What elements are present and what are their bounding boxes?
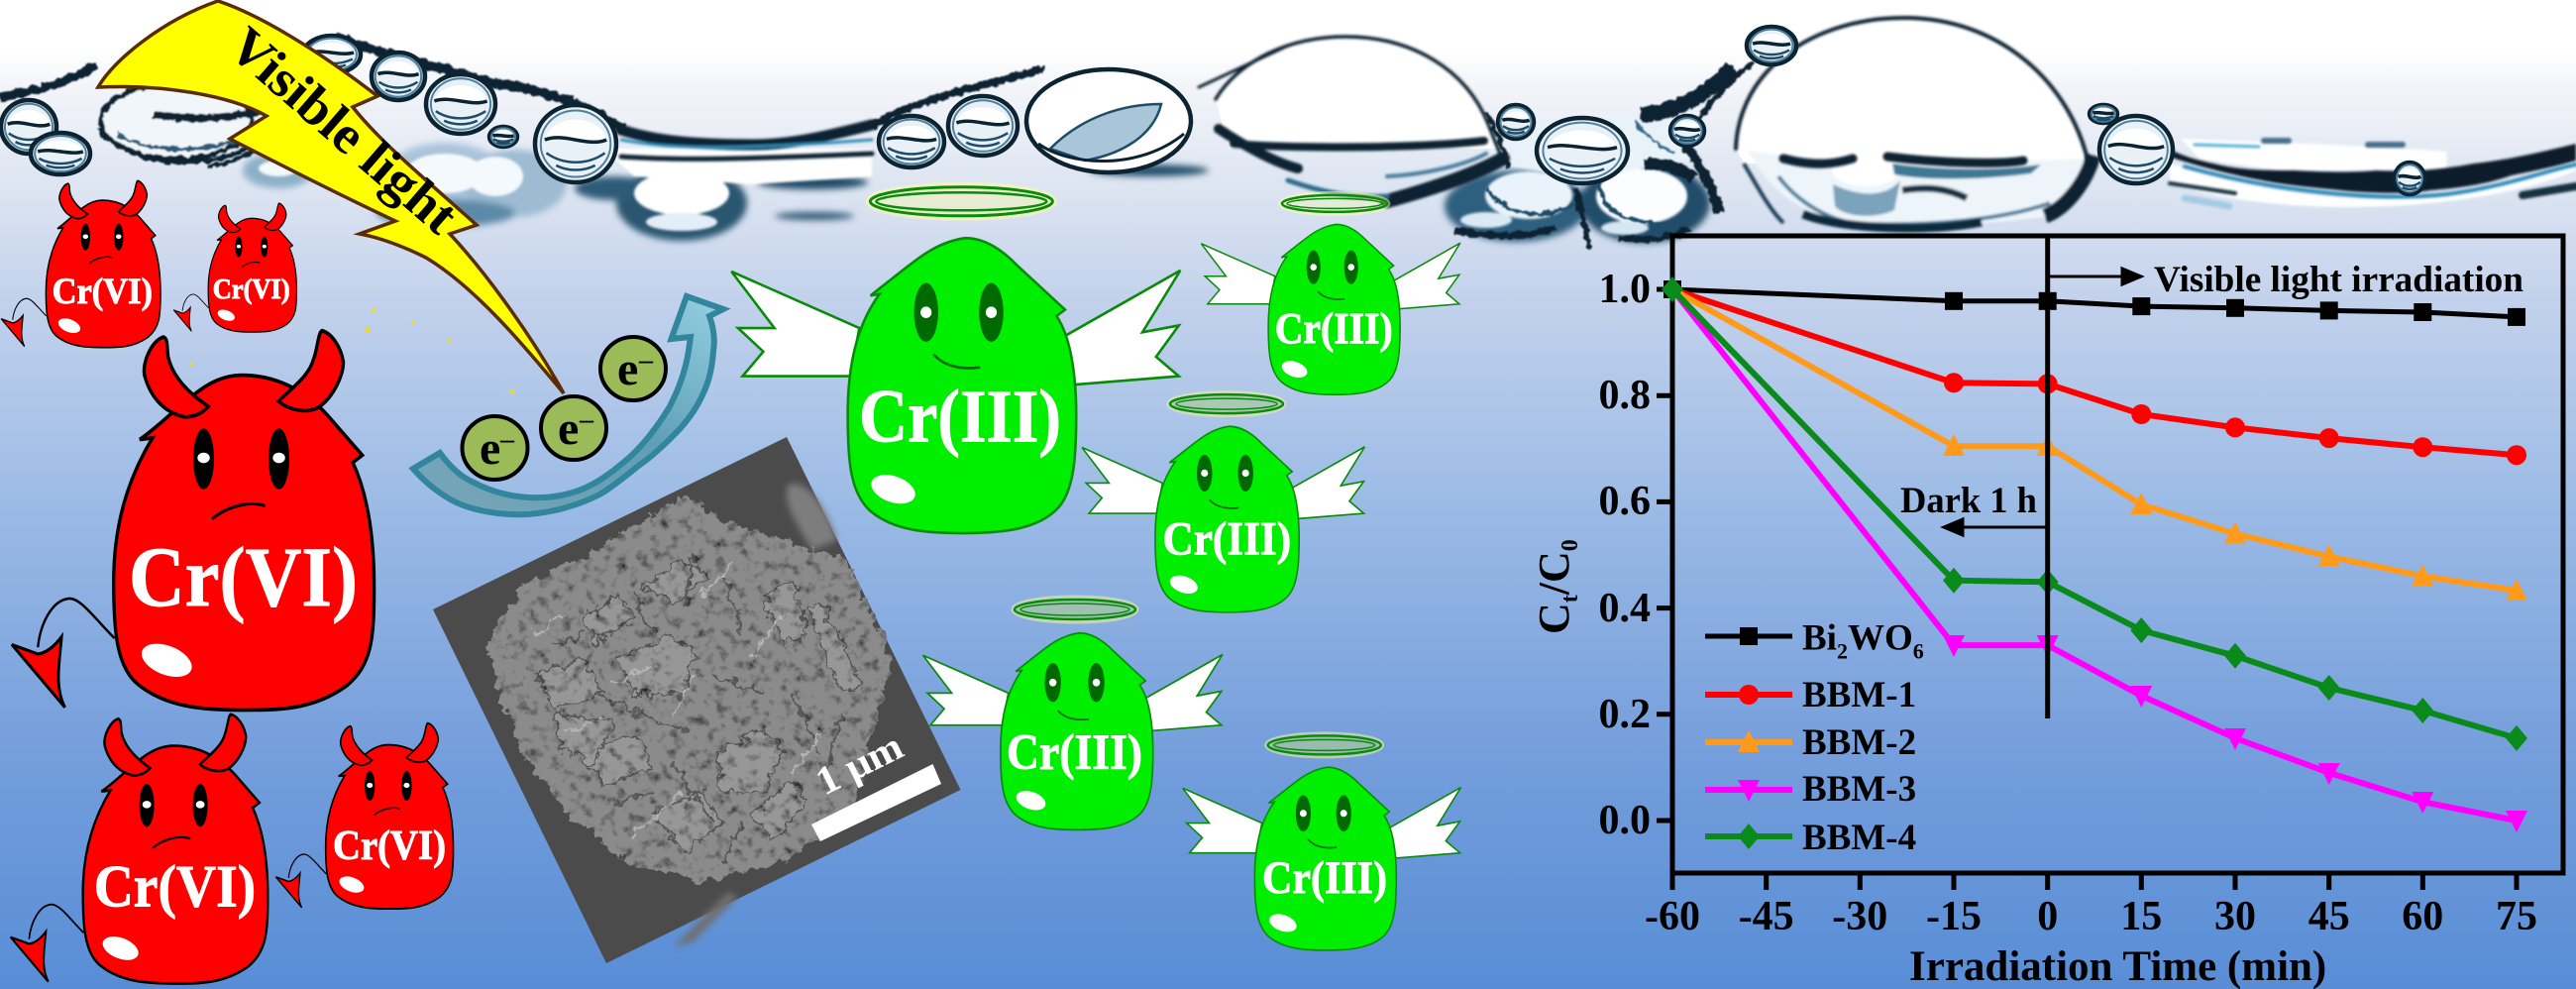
legend: BBM-1	[1705, 675, 1916, 715]
legend: Bi2WO6: 6	[1913, 639, 1924, 664]
devil: Cr(VI) bottom right	[275, 723, 454, 909]
plot frame	[1672, 236, 2563, 873]
SEM micrograph	[433, 437, 961, 963]
devil: Cr(VI) top left	[1, 180, 161, 348]
halo	[1014, 598, 1136, 621]
series: Bi2WO6	[1664, 280, 2525, 326]
line chart: Ct/C0 vs irradiation time	[1530, 236, 2563, 989]
arrow: dark	[1944, 519, 2047, 535]
devil: Cr(VI) bottom left	[11, 714, 268, 984]
legend: BBM-2: BBM-2	[1802, 722, 1916, 763]
angel: Cr(III) lower right: Cr(III)	[1262, 852, 1387, 904]
x tick labels: -30	[1832, 894, 1887, 939]
electron 1: –	[499, 425, 515, 454]
axis ticks	[1657, 289, 2517, 890]
bubble 1 interior	[1216, 37, 1496, 149]
legend: BBM-4: BBM-4	[1802, 818, 1916, 858]
legend: Bi2WO6: Bi	[1802, 618, 1837, 659]
x tick labels: 60	[2402, 894, 2443, 939]
series: BBM-3	[1672, 289, 2527, 832]
angel: Cr(III) middle	[1082, 393, 1364, 612]
textured left and central clusters	[0, 38, 1754, 248]
legend: Bi2WO6	[1705, 618, 1924, 664]
spike	[1199, 46, 1288, 87]
right dark band	[2089, 109, 2576, 193]
droplets below the surface	[243, 143, 1710, 243]
SEM particle	[487, 495, 893, 883]
devil: Cr(VI) bottom right: Cr(VI)	[333, 824, 446, 869]
y tick labels: 0.8	[1599, 373, 1651, 418]
halo	[1281, 193, 1388, 213]
label: dark 1 h: Dark 1 h	[1900, 481, 2037, 521]
bubble: medium	[1026, 69, 1191, 172]
devil: Cr(VI) top second: Cr(VI)	[213, 274, 290, 305]
angel: Cr(III) lower centre: Cr(III)	[1007, 725, 1142, 781]
devil: Cr(VI) large	[12, 331, 375, 710]
y tick labels: 0.6	[1599, 479, 1651, 524]
legend: Bi2WO6: WO	[1848, 618, 1913, 659]
legend: BBM-1: BBM-1	[1802, 675, 1916, 715]
legend: Bi2WO6: 2	[1837, 639, 1848, 664]
angel: Cr(III) lower centre	[923, 598, 1223, 829]
water surface with bubbles	[0, 18, 2576, 248]
scale label: 1 μm	[808, 723, 910, 804]
y axis title: t	[1557, 595, 1583, 603]
x tick labels: 0	[2037, 894, 2058, 939]
y tick labels: 0.0	[1599, 798, 1651, 843]
y tick labels: 0.2	[1599, 692, 1651, 737]
devil: Cr(VI) top second	[173, 203, 296, 332]
x tick labels: 15	[2120, 894, 2162, 939]
x tick labels: -45	[1739, 894, 1794, 939]
devil: Cr(VI) bottom left: Cr(VI)	[94, 854, 256, 920]
dark surface strokes	[621, 18, 2089, 201]
series: BBM-1	[1672, 289, 2526, 465]
right white banks	[2181, 139, 2447, 170]
electron 2: –	[579, 405, 594, 434]
series: BBM-2	[1672, 289, 2527, 601]
halo	[1267, 734, 1382, 756]
centre ribbon	[604, 149, 872, 184]
x tick labels: 45	[2308, 894, 2350, 939]
x tick labels: -15	[1926, 894, 1982, 939]
small ring bubbles	[1, 27, 2424, 194]
cluster below bubble 1	[1453, 228, 1556, 236]
bubble 2 interior	[1736, 18, 2089, 164]
arrow: visible light irradiation	[2048, 269, 2141, 284]
electron 1: e	[480, 422, 500, 475]
x tick labels: -60	[1645, 894, 1700, 939]
bubble 1 waterline	[1234, 141, 1484, 147]
electron 1	[462, 416, 527, 480]
legend: BBM-2	[1705, 722, 1916, 763]
x tick labels: 75	[2496, 894, 2537, 939]
halo	[869, 185, 1053, 217]
x axis title: Irradiation Time (min)	[1909, 943, 2326, 989]
electron 2: e	[558, 402, 579, 455]
lightning bolt: visible light	[98, 1, 564, 393]
legend: BBM-3: BBM-3	[1802, 769, 1916, 810]
electron 2	[541, 396, 606, 460]
y tick labels: 0.4	[1599, 586, 1651, 631]
devil: Cr(VI) large: Cr(VI)	[129, 529, 358, 624]
label: visible light: Visible light	[218, 15, 470, 246]
y tick labels: 1.0	[1599, 267, 1651, 312]
electron 3	[600, 337, 666, 400]
angel: Cr(III) large	[731, 185, 1180, 533]
label: visible light irradiation: Visible light irradiation	[2154, 260, 2523, 300]
legend: BBM-3	[1705, 769, 1916, 810]
electron 3: e	[617, 343, 638, 395]
y axis title: /C	[1530, 551, 1578, 596]
bubble outlines	[1216, 37, 1500, 154]
electron 3: –	[638, 346, 654, 375]
devil: Cr(VI) top left: Cr(VI)	[53, 272, 153, 312]
angel: Cr(III) top right	[1201, 193, 1460, 394]
divider line at t = 0	[2045, 236, 2050, 718]
angel: Cr(III) top right: Cr(III)	[1275, 304, 1393, 353]
shallow bubble under the bolt	[101, 83, 252, 159]
angel: Cr(III) middle: Cr(III)	[1163, 513, 1291, 566]
y axis title: 0	[1557, 539, 1583, 551]
x tick labels: 30	[2214, 894, 2256, 939]
sparkles near the bolt	[189, 307, 515, 394]
y axis title: C	[1530, 603, 1578, 634]
x tick labels	[1645, 894, 2537, 939]
scale bar	[811, 764, 941, 841]
legend	[1705, 618, 1924, 858]
legend: BBM-4	[1705, 818, 1916, 858]
series: BBM-4	[1662, 276, 2527, 751]
y tick labels	[1599, 267, 1651, 843]
bubble 2 bowl	[1744, 151, 2093, 228]
angel: Cr(III) lower right	[1183, 734, 1460, 950]
curved arrow: electron flow	[413, 296, 723, 514]
angel: Cr(III) large: Cr(III)	[859, 376, 1061, 459]
halo	[1169, 393, 1284, 415]
